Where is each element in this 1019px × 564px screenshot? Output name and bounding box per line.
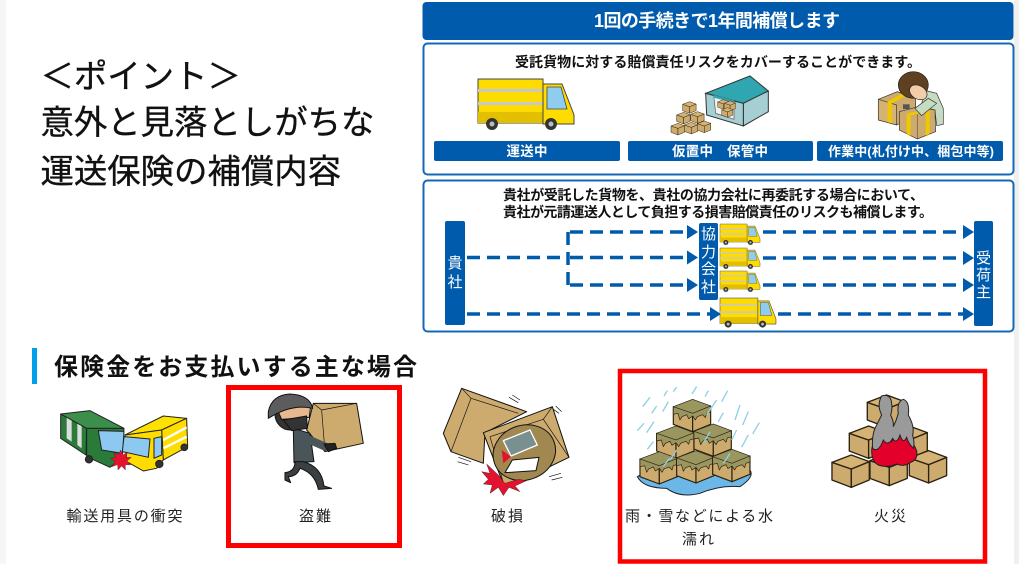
panel: cargo liability coverage xyxy=(424,44,1014,174)
icon: wet stacked boxes xyxy=(637,387,759,495)
label: 濡れ xyxy=(682,531,714,548)
icon: worker packing boxes xyxy=(878,72,943,139)
label: 雨・雪などによる水 xyxy=(625,508,773,525)
highlight frame: water and fire xyxy=(620,371,985,562)
case: fire xyxy=(832,395,947,525)
icon: thief carrying box xyxy=(268,394,363,489)
icons: partner trucks xyxy=(720,224,760,292)
panel text xyxy=(503,187,933,220)
label: temporary storage: 仮置中 保管中 xyxy=(672,143,768,159)
arrows: direct flow xyxy=(467,307,974,321)
label: in transit xyxy=(434,141,620,161)
box: your company xyxy=(445,221,465,325)
panel: subcontracting coverage xyxy=(424,180,1014,332)
icon: burning boxes xyxy=(832,395,947,487)
icon: warehouse with boxes xyxy=(671,76,768,135)
label: working: 作業中(札付け中、梱包中等) xyxy=(828,144,994,159)
label: temporary storage xyxy=(628,141,813,161)
box: consignee: 主 xyxy=(976,284,991,301)
box: partner company: 協 xyxy=(701,226,716,243)
banner: one procedure: 1回の手続きで1年間補償します xyxy=(594,10,840,31)
case: collision xyxy=(61,411,188,525)
panel text: 受託貨物に対する賠償責任リスクをカバーすることができます。 xyxy=(515,54,921,70)
heading: point title xyxy=(40,59,374,191)
box: consignee: 荷 xyxy=(976,267,991,284)
box: partner company xyxy=(699,223,718,300)
label: 火災 xyxy=(874,508,906,525)
case: water damage xyxy=(625,387,773,548)
label: 盗難 xyxy=(299,508,331,525)
heading: point title: 意外と見落としがちな xyxy=(40,105,374,142)
box: consignee: 受 xyxy=(976,250,991,267)
panel text: 貴社が受託した貨物を、貴社の協力会社に再委託する場合において、 xyxy=(503,187,924,203)
box: partner company: 力 xyxy=(701,244,716,261)
section heading: main payout cases: 保険金をお支払いする主な場合 xyxy=(54,354,417,381)
label: 破損 xyxy=(491,508,523,525)
box: partner company: 社 xyxy=(701,279,716,296)
panel text: 貴社が元請運送人として負担する損害賠償責任のリスクも補償します。 xyxy=(503,204,933,220)
icon: large truck xyxy=(720,298,776,328)
box: consignee xyxy=(974,221,993,326)
case: damage xyxy=(443,388,569,525)
highlight frame: theft xyxy=(228,388,400,546)
label: working xyxy=(817,141,1003,161)
label: in transit: 運送中 xyxy=(506,143,548,159)
box: your company: 貴 xyxy=(447,255,463,272)
box: partner company: 会 xyxy=(701,261,716,278)
icon: yellow truck xyxy=(478,79,574,130)
icon: crushed box xyxy=(443,388,569,496)
heading: point title: 運送保険の補償内容 xyxy=(40,154,341,191)
box: your company: 社 xyxy=(447,274,463,291)
label: 輸送用具の衝突 xyxy=(66,508,182,525)
heading: point title: ＜ポイント＞ xyxy=(40,59,241,96)
case: theft xyxy=(228,388,400,546)
icon: truck collision xyxy=(61,411,188,471)
arrows: flow via partner xyxy=(467,225,974,292)
banner: one procedure xyxy=(422,2,1014,40)
